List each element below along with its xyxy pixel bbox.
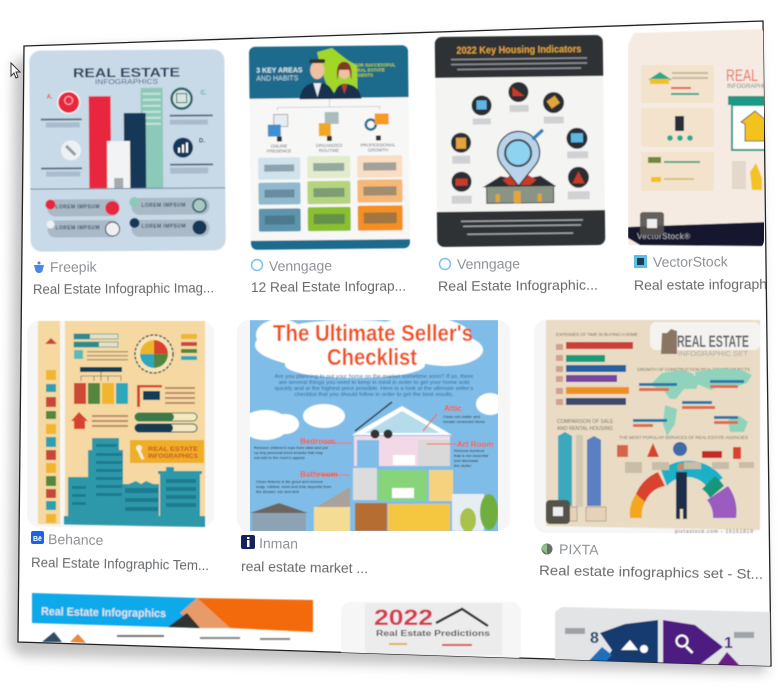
thumbnail: VectorStock real estate: VectorStock® — [637, 232, 690, 241]
thumbnail: real estate infographic set: AND RENTAL HOUSING — [557, 426, 613, 432]
thumbnail: the ultimate seller's checklist: soap, mildew, mold and lime deposits from — [256, 484, 332, 489]
thumbnail: the ultimate seller's checklist: Clean out clutter and — [443, 414, 480, 419]
card: Venngage housing indicators — [435, 35, 605, 294]
thumbnail: the ultimate seller's checklist: Are you planning to put your home on the market sometime soon? If so, there — [275, 374, 473, 380]
source: Venngage — [438, 258, 520, 272]
card: Inman — [237, 317, 510, 576]
card: VectorStock — [628, 29, 766, 292]
source: Behance — [31, 531, 103, 546]
thumbnail: the ultimate seller's checklist: Remove children's toys from view and put — [254, 445, 329, 450]
caption: Real Estate Infographic Imag... — [33, 279, 214, 297]
source: Inman: Inman — [259, 535, 298, 552]
source: Behance: Bē — [33, 536, 42, 543]
thumbnail: real estate infographic set: THE MOST POPULAR SERVICES OF REAL ESTATE AGENCIES — [619, 435, 748, 440]
thumbnail: 3 key areas and habits: REAL ESTATE — [354, 67, 385, 73]
thumbnail: VectorStock real estate: INFOGRAPHIC — [727, 84, 769, 90]
source: Venngage: Venngage — [457, 255, 520, 272]
thumbnail: 2022 key housing indicators: 2022 Key Housing Indicators — [456, 43, 582, 57]
thumbnail: the ultimate seller's checklist: and decrease — [454, 458, 479, 463]
source: Inman — [241, 535, 298, 549]
thumbnail: the ultimate seller's checklist: Bathroom — [300, 470, 338, 479]
thumbnail: the ultimate seller's checklist: checklist that you should follow in order to get the best results. — [294, 392, 454, 398]
caption: Real estate infographics set - St... — [539, 562, 763, 582]
thumbnail: purple and navy segmented wheel: 1 — [724, 635, 733, 652]
thumbnail: 3 key areas and habits: FOR SUCCESSFUL — [354, 62, 396, 68]
icon: mouse cursor — [11, 63, 20, 78]
thumbnail backing — [237, 320, 510, 531]
thumbnail: the ultimate seller's checklist: the clutter — [454, 463, 472, 468]
thumbnail: 3 key areas and habits: ONLINE — [271, 143, 287, 149]
caption: 12 Real Estate Infograp... — [251, 278, 406, 295]
thumbnail: real estate infographics banner: Real Estate Infographics — [41, 606, 166, 620]
thumbnail: real estate infographics: LOREM IMPSUM — [142, 224, 186, 230]
thumbnail: real estate infographic set: EXPENSES OF TIME IN BUYING A HOME — [556, 332, 638, 337]
thumbnail: 2022 real estate predictions: Real Estate Predictions — [376, 629, 491, 638]
thumbnail: the ultimate seller's checklist: quickly and at the highest price possible. Here is a look at the ultimate seller's — [275, 386, 473, 392]
thumbnail: the ultimate seller's checklist: Clean fixtures & tile grout and remove — [256, 479, 324, 484]
thumbnail: real estate infographic template: INFOGRAPHICS — [148, 453, 199, 460]
thumbnail backing — [27, 321, 214, 527]
caption: Real Estate Infographic Tem... — [31, 554, 209, 573]
thumbnail: real estate infographic set: COMPARISON OF SALE — [557, 419, 614, 425]
thumbnail: the ultimate seller's checklist: Bedroom — [300, 437, 335, 446]
card: Behance — [27, 321, 214, 573]
caption: real estate market ... — [241, 558, 368, 576]
thumbnail: the ultimate seller's checklist: Remove furniture — [454, 448, 485, 453]
thumbnail: the ultimate seller's checklist — [241, 317, 504, 532]
source: VectorStock — [634, 255, 728, 268]
thumbnail: purple and navy segmented wheel — [555, 607, 770, 670]
source: PIXTA — [541, 544, 598, 555]
source: Venngage: Venngage — [269, 257, 332, 274]
thumbnail: the ultimate seller's checklist: not add to the room's appeal — [254, 455, 305, 460]
source: Freepik — [34, 262, 96, 275]
card: Freepik — [29, 49, 226, 297]
thumbnail: 2022 key housing indicators — [435, 35, 605, 247]
thumbnail backing — [534, 320, 760, 533]
thumbnail: 3 key areas and habits: ORGANIZED — [316, 143, 343, 148]
thumbnail: the ultimate seller's checklist: Art Room — [457, 440, 493, 449]
thumbnail: 3 key areas and habits: 3 KEY AREAS — [256, 67, 303, 75]
source: Behance: Behance — [48, 531, 104, 548]
thumbnail: 3 key areas and habits: PROFESSIONAL — [360, 142, 396, 148]
thumbnail: the ultimate seller's checklist: that is not essential — [454, 453, 488, 458]
thumbnail: the ultimate seller's checklist: up any personal knick-knacks that may — [254, 450, 323, 455]
thumbnail: 2022 real estate predictions: 2022 — [374, 605, 433, 630]
thumbnail: 3 key areas and habits: PRESENCE — [267, 148, 291, 154]
thumbnail: real estate infographics: A. — [47, 95, 53, 101]
thumbnail: 3 key areas and habits: GROWTH — [368, 147, 388, 153]
thumbnail: real estate infographic template — [38, 321, 205, 528]
thumbnail: real estate infographics — [29, 49, 226, 252]
thumbnail: real estate infographics: LOREM IMPSUM — [55, 204, 99, 211]
thumbnail: real estate infographic set — [546, 320, 760, 535]
thumbnail: real estate infographics: D. — [199, 138, 205, 144]
thumbnail: real estate infographic template: REAL ESTATE — [148, 446, 199, 453]
thumbnail: VectorStock real estate — [628, 29, 769, 246]
thumbnail: 3 key areas and habits: AGENTS — [354, 73, 373, 78]
thumbnail: the ultimate seller's checklist: The Ultimate Seller's — [273, 320, 473, 346]
thumbnail: 3 key areas and habits — [249, 45, 410, 250]
thumbnail: 3 key areas and habits: ROUTINE — [319, 148, 339, 153]
thumbnail: the ultimate seller's checklist: donate unneeded items — [443, 419, 485, 424]
thumbnail: 2022 real estate predictions — [341, 602, 521, 662]
caption: Real Estate Infographic... — [438, 277, 598, 294]
card: Venngage 12 infographics — [249, 45, 410, 295]
thumbnail: the ultimate seller's checklist: Checklist — [327, 344, 417, 370]
source: Freepik: Freepik — [50, 259, 98, 275]
source: PIXTA: PIXTA — [559, 541, 599, 558]
thumbnail: purple and navy segmented wheel: 8 — [590, 630, 599, 647]
thumbnail: real estate infographics banner — [32, 593, 313, 643]
card: PIXTA — [534, 320, 763, 582]
thumbnail: real estate infographic set: GROWTH OF CONSTRUCTION REAL ESTATE OBJECTS — [637, 367, 750, 372]
thumbnail: VectorStock real estate: REAL — [726, 66, 758, 85]
thumbnail: real estate infographics: LOREM IMPSUM — [56, 225, 100, 232]
thumbnail: real estate infographic set: pixtastock.com - 15151819 — [675, 529, 753, 535]
source: VectorStock: VectorStock — [653, 253, 729, 270]
thumbnail: the ultimate seller's checklist: are several things you need to keep in mind in order to get your home sold — [279, 380, 469, 386]
thumbnail: real estate infographics: C. — [201, 90, 207, 96]
thumbnail: real estate infographics: INFOGRAPHICS — [95, 79, 158, 86]
thumbnail: the ultimate seller's checklist: the shower, tub and sink — [256, 489, 299, 494]
thumbnail: 3 key areas and habits: AND HABITS — [256, 75, 299, 83]
caption: Real estate infographics — [634, 276, 783, 293]
thumbnail: the ultimate seller's checklist: Attic — [444, 404, 462, 413]
thumbnail: real estate infographics: LOREM IMPSUM — [141, 203, 185, 209]
thumbnail: real estate infographics: REAL ESTATE — [73, 65, 180, 80]
thumbnail: real estate infographic set: INFOGRAPHIC SET — [678, 349, 748, 358]
